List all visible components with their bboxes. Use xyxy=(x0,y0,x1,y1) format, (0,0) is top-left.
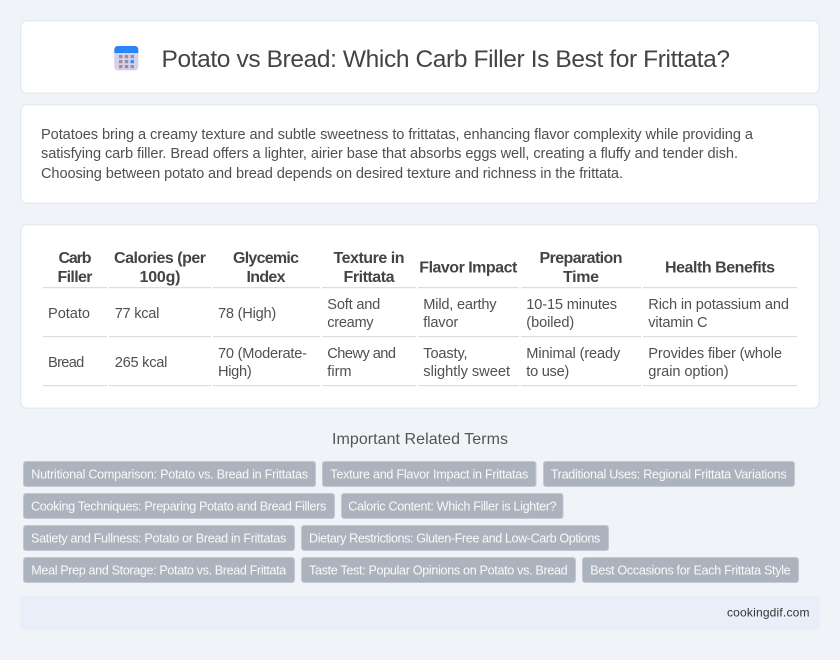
table row: potato: 78 (High) xyxy=(218,306,276,322)
table row: bread: grain option) xyxy=(648,364,729,380)
text block: description: satisfying carb filler. Bread offers a lighter, airier base that absorbs eggs well, creating a fluffy and tender dish. xyxy=(41,146,738,162)
panel: title card xyxy=(21,21,819,93)
table header: Texture in xyxy=(334,250,404,267)
table header: Time xyxy=(563,269,599,286)
chip xyxy=(24,558,294,582)
chip xyxy=(342,494,563,518)
table row: bread: Toasty, xyxy=(423,346,468,362)
panel: related term chips xyxy=(24,462,798,582)
table header: Index xyxy=(246,269,286,286)
table header: Glycemic xyxy=(233,250,299,267)
table row: bread: High) xyxy=(218,364,252,380)
chip: Dietary Restrictions: Gluten-Free and Low-Carb Options xyxy=(309,531,600,545)
text block: description: Choosing between potato and bread depends on desired texture and richness in the frittata. xyxy=(41,166,623,182)
table row: bread: Bread xyxy=(48,355,84,371)
footer: cookingdif.com xyxy=(727,606,810,620)
table row: potato: 77 kcal xyxy=(115,306,159,322)
table row: potato: 10-15 minutes xyxy=(526,297,617,313)
chip xyxy=(24,494,334,518)
table header: Flavor Impact xyxy=(419,260,518,276)
table row: potato: vitamin C xyxy=(648,315,708,331)
text block: description: Potatoes bring a creamy texture and subtle sweetness to frittatas, enhancing flavor complexity while providing a xyxy=(41,127,754,143)
chip: Caloric Content: Which Filler is Lighter? xyxy=(348,499,557,513)
table row: potato: Rich in potassium and xyxy=(648,297,789,313)
table row: bread: slightly sweet xyxy=(423,364,510,380)
table row: potato: (boiled) xyxy=(526,315,574,331)
title: Potato vs Bread: Which Carb Filler Is Best for Frittata? xyxy=(162,46,730,73)
table header: Calories (per xyxy=(114,250,206,267)
icon: calendar xyxy=(114,46,138,70)
table header: Health Benefits xyxy=(665,260,775,276)
chip xyxy=(582,558,798,582)
table header: Preparation xyxy=(540,250,622,267)
chip xyxy=(24,526,294,550)
chip: Traditional Uses: Regional Frittata Variations xyxy=(551,467,787,481)
table row: bread: to use) xyxy=(526,364,569,380)
chip: Meal Prep and Storage: Potato vs. Bread Frittata xyxy=(31,563,286,577)
table row: bread: Provides fiber (whole xyxy=(648,346,782,362)
table row: potato: Potato xyxy=(48,306,90,322)
chip: Cooking Techniques: Preparing Potato and Bread Fillers xyxy=(31,499,326,513)
table row: potato: creamy xyxy=(327,315,374,331)
chip xyxy=(302,526,608,550)
table header xyxy=(58,250,775,286)
panel: comparison table xyxy=(21,225,819,408)
chip: Taste Test: Popular Opinions on Potato vs. Bread xyxy=(309,563,568,577)
chip xyxy=(302,558,576,582)
chip: Satiety and Fullness: Potato or Bread in Frittatas xyxy=(31,531,286,545)
chip: Nutritional Comparison: Potato vs. Bread in Frittatas xyxy=(31,467,308,481)
chip: Texture and Flavor Impact in Frittatas xyxy=(330,467,528,481)
table row: bread xyxy=(48,346,782,380)
table header: Carb xyxy=(58,250,92,267)
chip xyxy=(544,462,794,486)
heading: related terms: Important Related Terms xyxy=(332,431,508,448)
panel: description xyxy=(21,105,819,203)
chip xyxy=(24,462,316,486)
table row: potato xyxy=(48,297,789,331)
table row: potato: Soft and xyxy=(327,297,380,313)
table header: Frittata xyxy=(344,269,395,286)
footer xyxy=(20,596,820,630)
chip xyxy=(322,462,536,486)
table header: Filler xyxy=(58,269,92,286)
chip: Best Occasions for Each Frittata Style xyxy=(590,563,791,577)
table header: 100g) xyxy=(140,269,180,286)
table row: potato: flavor xyxy=(423,315,458,331)
table row: potato: Mild, earthy xyxy=(423,297,497,313)
text block: description xyxy=(41,127,754,182)
table row: bread: 265 kcal xyxy=(115,355,167,371)
table row: bread: Chewy and xyxy=(327,346,396,362)
table row: bread: Minimal (ready xyxy=(526,346,621,362)
table row: bread: firm xyxy=(327,364,352,380)
table row: bread: 70 (Moderate- xyxy=(218,346,307,362)
